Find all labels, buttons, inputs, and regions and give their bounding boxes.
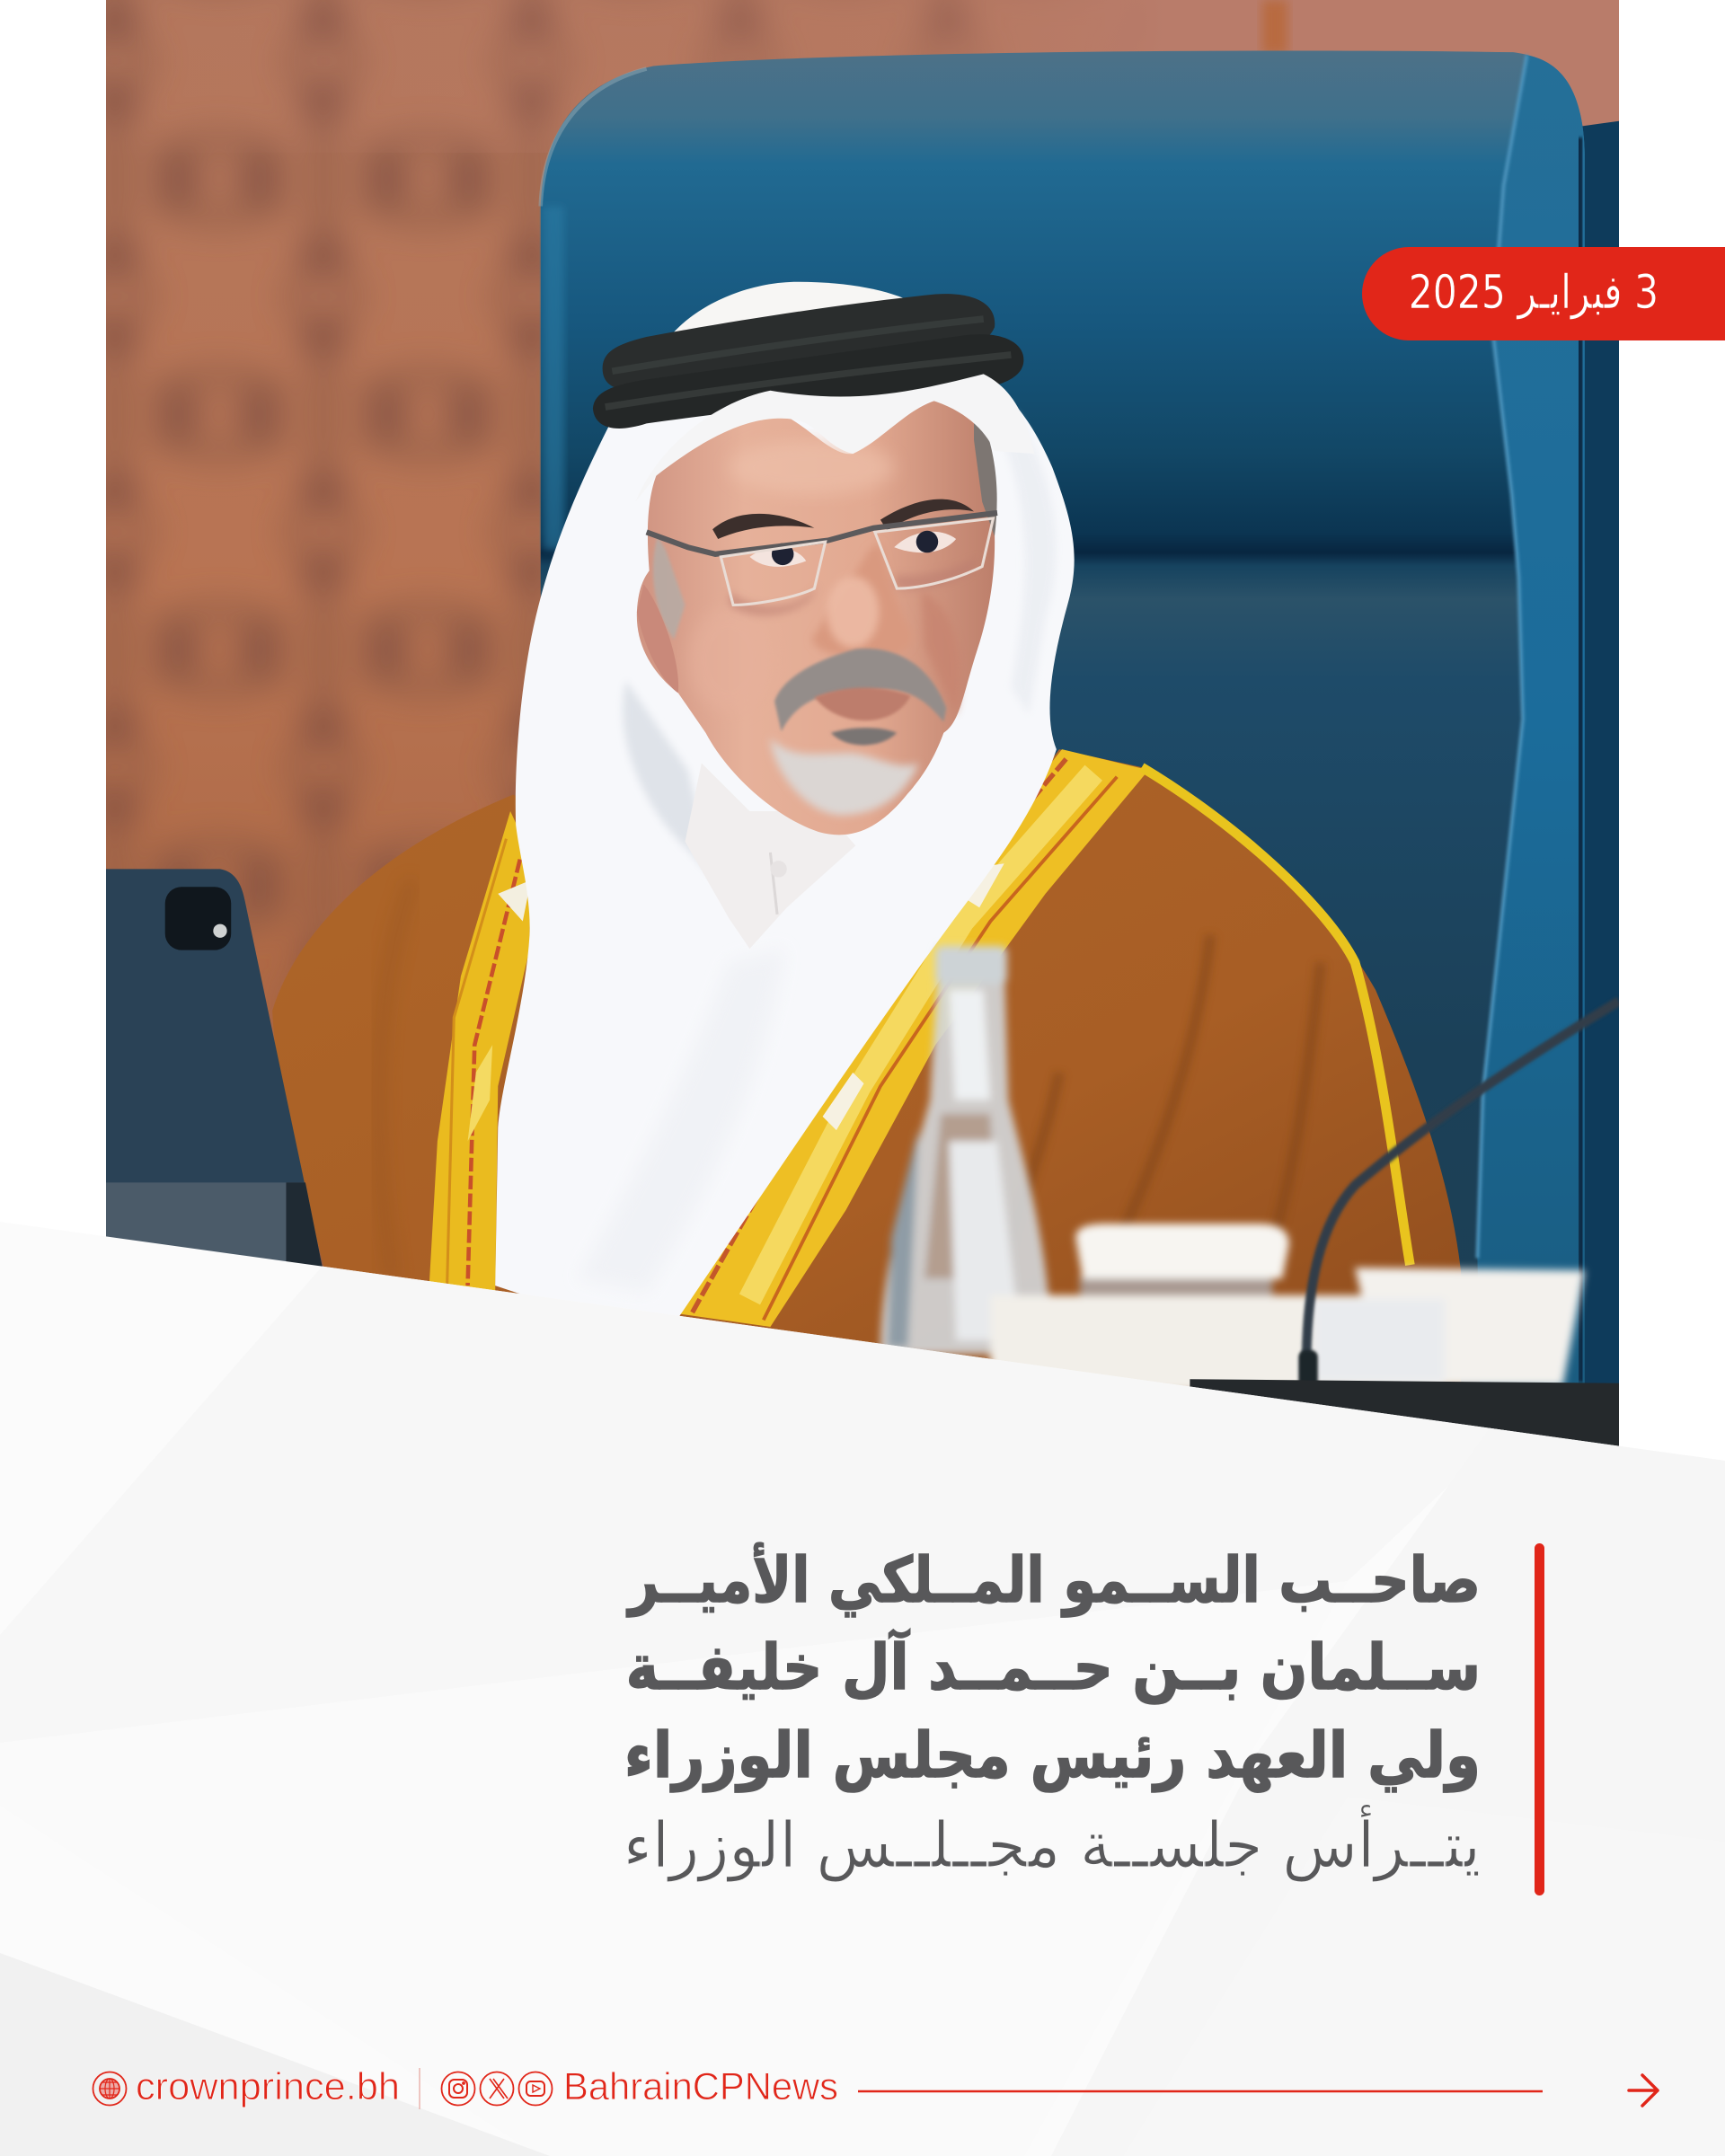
headline line 2: ســلمان بــن حــمــد آل خليفــة [626, 1628, 1481, 1704]
head top: white dome [665, 282, 919, 344]
robe: brown bisht [272, 749, 1461, 1389]
icon: instagram [442, 2072, 474, 2106]
date text: 3 فبرايـر 2025 [1409, 266, 1659, 320]
social handle label: BahrainCPNews [563, 2065, 838, 2108]
tablet on desk [106, 869, 323, 1267]
date badge [1362, 247, 1725, 340]
desk: dark table edge [1190, 1379, 1619, 1457]
chair back: blue leather [541, 50, 1585, 1389]
icon: youtube [519, 2072, 552, 2106]
headline line 4: يتــرأس جلســة مجــلــس الوزراء [624, 1803, 1481, 1882]
eyebrows [712, 499, 974, 539]
website label: crownprince.bh [136, 2065, 400, 2108]
headline line 1: صاحــب الســمو المــلكي الأميــر [626, 1542, 1481, 1617]
face [637, 399, 997, 835]
white box and cups [990, 1268, 1585, 1392]
accent bar: red vertical rule [1535, 1543, 1544, 1895]
wall: blurred patterned wood panel [106, 0, 1619, 1267]
photo: Crown Prince seated at cabinet session [36, 0, 1689, 1457]
headline: title block [624, 1542, 1481, 1882]
thobe collar [685, 763, 855, 949]
ghutra: white head scarf [495, 374, 1075, 1320]
gold piping on robe edge [1142, 767, 1410, 1265]
arrow [1629, 2075, 1658, 2106]
headline line 3: ولي العهد رئيس مجلس الوزراء [624, 1719, 1481, 1793]
ghutra fold on forehead [635, 374, 1034, 502]
gold trim, left side [429, 811, 531, 1293]
water bottle [880, 946, 1052, 1355]
icon: X [480, 2072, 514, 2106]
footer: website and social links [93, 2065, 1658, 2109]
glasses [647, 513, 997, 605]
gold trim, right side [674, 749, 1148, 1327]
eyes [749, 531, 956, 567]
icon: globe [93, 2072, 126, 2106]
background panel: light geometric slanted section [0, 1204, 1725, 2156]
second chair behind, right edge [1583, 120, 1619, 1383]
facial hair: moustache and goatee [770, 649, 946, 816]
microphone stem [1306, 1001, 1619, 1396]
jar with white lid [1075, 1224, 1289, 1309]
agal: black head cord [593, 294, 1023, 429]
